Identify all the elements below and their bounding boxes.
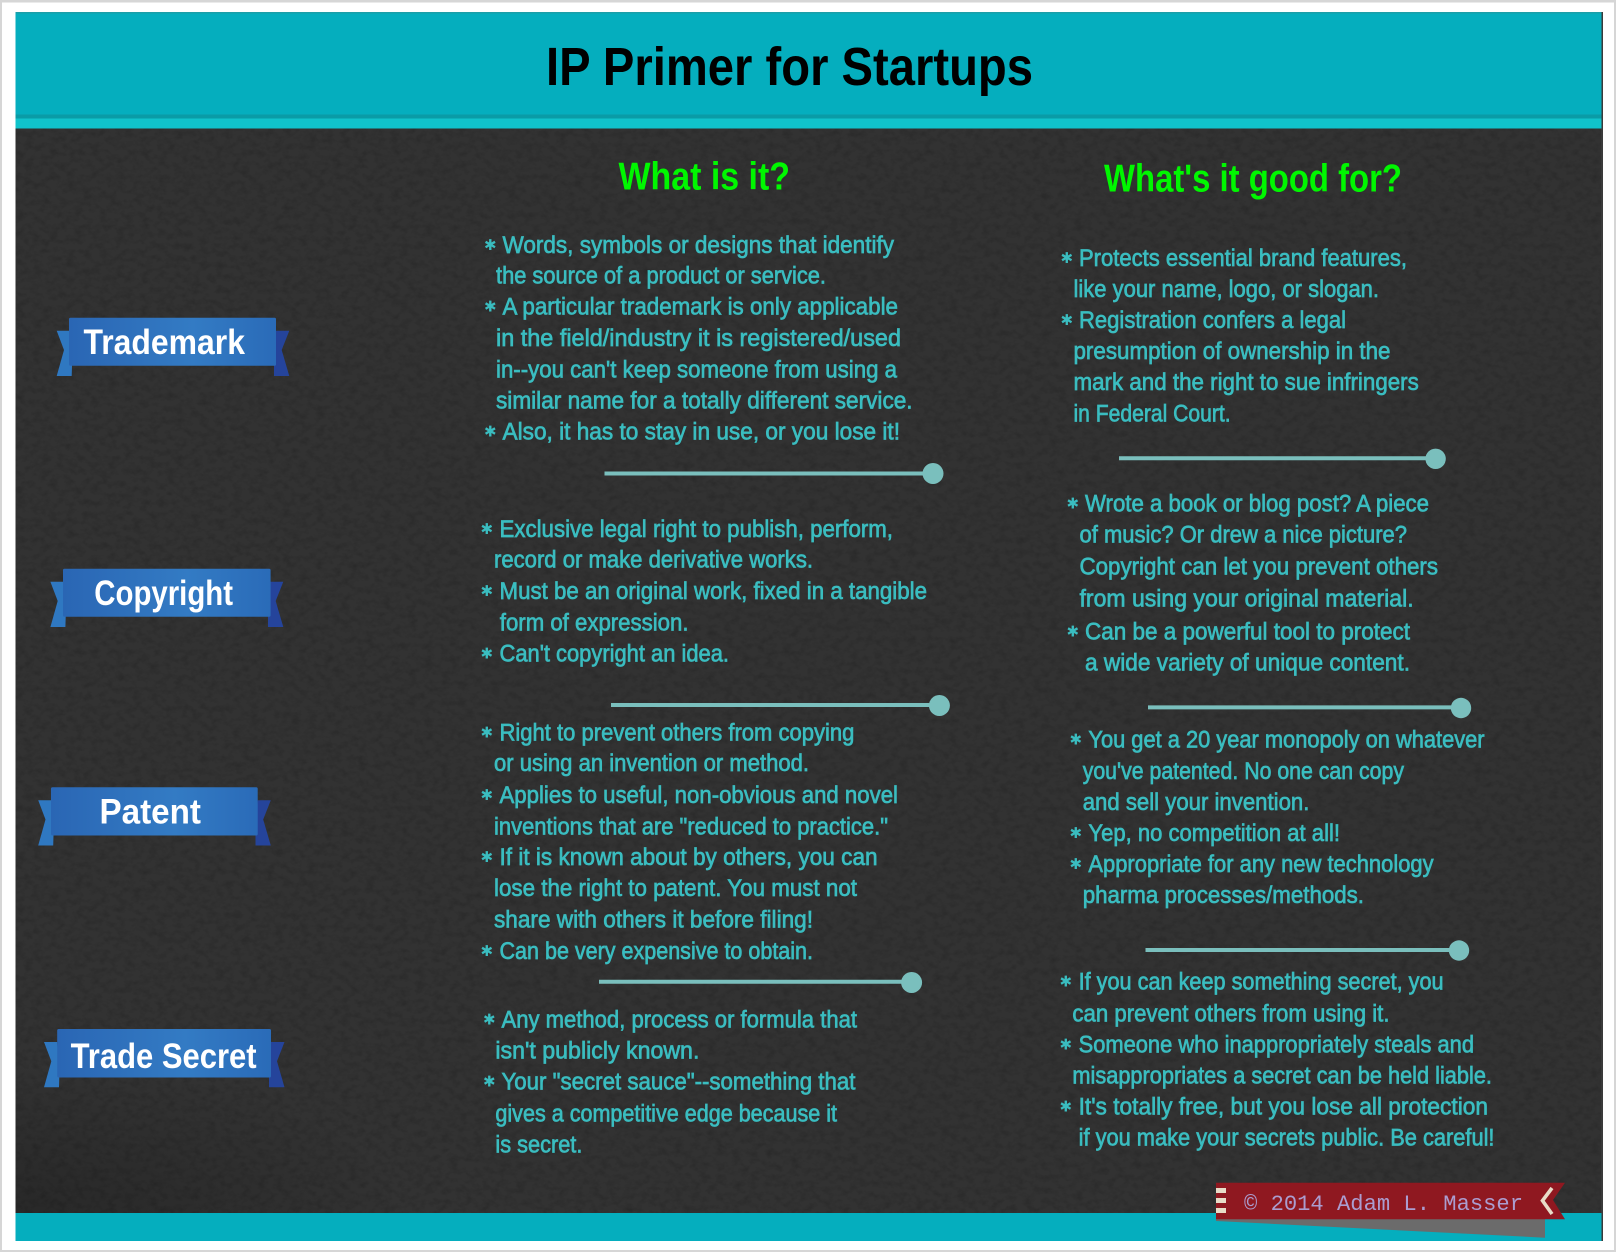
- text block: trademark good for: ✱: [1060, 249, 1073, 267]
- text block: copyright what is it: Exclusive legal right to publish, perform,: [500, 516, 893, 543]
- text block: trademark what is it: the source of a product or service.: [496, 262, 826, 290]
- text block: trademark good for: mark and the right to sue infringers: [1074, 369, 1419, 396]
- text block: trade secret good for: ✱: [1060, 972, 1072, 990]
- text block: copyright good for: a wide variety of unique content.: [1085, 650, 1410, 676]
- text block: trade secret good for: It's totally free, but you lose all protection: [1079, 1094, 1488, 1120]
- text block: copyright what is it: Can't copyright an idea.: [500, 640, 729, 668]
- header band: [16, 12, 1602, 128]
- text block: copyright good for: from using your original material.: [1080, 586, 1414, 612]
- divider: slider 2 right: [1148, 698, 1471, 718]
- text block: patent what is it: ✱: [480, 942, 493, 960]
- text block: trade secret good for: if you make your secrets public. Be careful!: [1079, 1124, 1494, 1152]
- column heading: what is it: What is it?: [618, 156, 790, 199]
- copyright ribbon: [1216, 1183, 1565, 1238]
- text block: trade secret good for: ✱: [1060, 1036, 1072, 1054]
- ribbon: patent: [38, 787, 271, 846]
- ribbon: trade secret: [44, 1029, 284, 1087]
- text block: copyright good for: [1066, 490, 1438, 676]
- text block: trademark good for: ✱: [1060, 311, 1073, 329]
- text block: patent good for: pharma processes/methods.: [1083, 882, 1364, 909]
- ribbon: trademark: [57, 318, 289, 376]
- text block: patent good for: Yep, no competition at all!: [1088, 820, 1340, 847]
- text block: patent good for: ✱: [1070, 855, 1082, 873]
- text block: patent what is it: or using an invention or method.: [494, 750, 809, 777]
- text block: trade secret good for: [1060, 968, 1494, 1152]
- text block: trade secret what is it: gives a competitive edge because it: [495, 1100, 837, 1128]
- text block: patent good for: ✱: [1070, 824, 1082, 842]
- text block: trademark what is it: in the field/industry it is registered/used: [496, 325, 901, 352]
- text block: copyright good for: ✱: [1066, 622, 1079, 640]
- copyright ribbon: © 2014 Adam L. Masser: [1244, 1192, 1523, 1217]
- text block: copyright what is it: record or make derivative works.: [494, 546, 813, 574]
- divider: slider 2 left: [611, 695, 950, 716]
- text block: trademark good for: presumption of ownership in the: [1074, 338, 1390, 365]
- text block: copyright good for: Copyright can let you prevent others: [1080, 554, 1438, 580]
- ribbon: copyright: [50, 569, 283, 627]
- text block: copyright good for: ✱: [1066, 494, 1079, 512]
- footer band: [16, 1213, 1602, 1241]
- text block: copyright what is it: ✱: [480, 582, 493, 600]
- text block: trademark good for: Registration confers a legal: [1079, 307, 1346, 334]
- ribbon: patent: Patent: [100, 793, 201, 832]
- text block: patent good for: [1070, 726, 1485, 909]
- text block: trade secret good for: misappropriates a secret can be held liable.: [1072, 1062, 1492, 1090]
- text block: trademark what is it: in--you can't keep someone from using a: [496, 356, 898, 384]
- text block: patent good for: you've patented. No one can copy: [1083, 758, 1404, 785]
- divider: slider 1 right: [1119, 449, 1446, 469]
- text block: copyright what is it: ✱: [480, 644, 493, 662]
- text block: patent good for: and sell your invention.: [1083, 789, 1309, 816]
- column heading: what's it good for: What's it good for?: [1104, 158, 1402, 201]
- text block: copyright what is it: form of expression.: [500, 610, 688, 636]
- text block: patent good for: You get a 20 year monopoly on whatever: [1088, 726, 1485, 753]
- text block: trademark good for: like your name, logo, or slogan.: [1074, 276, 1379, 303]
- text block: trade secret good for: Someone who inappropriately steals and: [1079, 1032, 1474, 1058]
- text block: patent good for: Appropriate for any new technology: [1088, 851, 1434, 878]
- text block: trademark good for: in Federal Court.: [1074, 400, 1231, 428]
- text block: patent what is it: Can be very expensive to obtain.: [500, 938, 813, 965]
- text block: copyright what is it: Must be an original work, fixed in a tangible: [500, 578, 927, 605]
- text block: trademark what is it: ✱: [484, 236, 497, 254]
- text block: trademark good for: Protects essential brand features,: [1079, 245, 1407, 272]
- text block: trademark good for: [1060, 245, 1419, 428]
- text block: trademark what is it: A particular trademark is only applicable: [502, 294, 898, 320]
- text block: patent what is it: inventions that are "reduced to practice.": [494, 813, 888, 840]
- text block: trade secret good for: If you can keep something secret, you: [1079, 968, 1444, 996]
- text block: trademark what is it: similar name for a totally different service.: [496, 388, 913, 414]
- title: IP Primer for Startups: [546, 37, 1033, 97]
- text block: trade secret what is it: Your "secret sauce"--something that: [502, 1068, 856, 1096]
- divider: slider 3 left: [599, 972, 922, 993]
- text block: patent what is it: ✱: [480, 786, 493, 804]
- ribbon: trade secret: Trade Secret: [71, 1037, 257, 1076]
- text block: trade secret what is it: isn't publicly known.: [495, 1038, 699, 1064]
- text block: patent what is it: If it is known about by others, you can: [500, 844, 878, 871]
- text block: trade secret what is it: Any method, process or formula that: [502, 1006, 857, 1034]
- divider: slider 3 right: [1146, 940, 1469, 961]
- text block: patent what is it: [480, 720, 898, 965]
- text block: trademark what is it: Words, symbols or designs that identify: [502, 232, 894, 259]
- text block: trade secret what is it: ✱: [483, 1072, 496, 1090]
- ribbon: trademark: Trademark: [84, 323, 245, 362]
- text block: patent what is it: lose the right to patent. You must not: [494, 875, 857, 902]
- text block: trademark what is it: [484, 232, 913, 446]
- divider: slider 1 left: [604, 463, 944, 484]
- text block: copyright good for: Wrote a book or blog post? A piece: [1085, 490, 1429, 518]
- text block: patent what is it: Right to prevent others from copying: [500, 720, 854, 746]
- text block: patent good for: ✱: [1070, 730, 1082, 748]
- text block: copyright good for: Can be a powerful tool to protect: [1085, 618, 1410, 646]
- text block: patent what is it: ✱: [480, 724, 493, 742]
- text block: trade secret what is it: ✱: [483, 1010, 496, 1028]
- ribbon: copyright: Copyright: [94, 574, 233, 613]
- text block: patent what is it: share with others it before filing!: [494, 906, 813, 933]
- text block: trade secret what is it: is secret.: [495, 1132, 582, 1158]
- text block: trademark what is it: Also, it has to stay in use, or you lose it!: [502, 418, 900, 446]
- text block: copyright what is it: ✱: [480, 520, 493, 538]
- text block: trademark what is it: ✱: [484, 298, 497, 316]
- text block: trade secret good for: can prevent others from using it.: [1072, 1000, 1390, 1028]
- text block: trade secret what is it: [483, 1006, 857, 1158]
- text block: patent what is it: ✱: [480, 848, 493, 866]
- text block: copyright what is it: [480, 516, 927, 668]
- text block: trademark what is it: ✱: [484, 422, 497, 440]
- text block: trade secret good for: ✱: [1060, 1098, 1072, 1116]
- text block: copyright good for: of music? Or drew a nice picture?: [1080, 522, 1407, 548]
- text block: patent what is it: Applies to useful, non-obvious and novel: [500, 782, 898, 809]
